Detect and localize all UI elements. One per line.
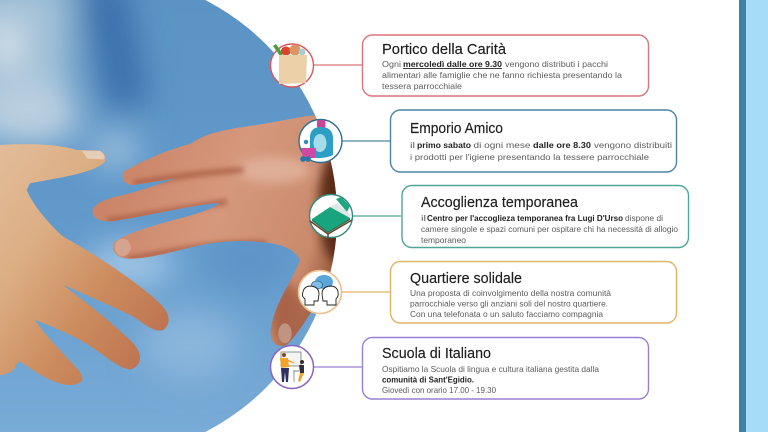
description: camere singole e spazi comuni per ospitare chi ha necessità di allogio (421, 224, 678, 234)
connector (353, 215, 401, 217)
card box (390, 110, 676, 172)
description: Giovedì con orario 17.00 - 19.30 (382, 385, 496, 395)
heading: Quartiere solidale (410, 270, 522, 287)
panel: Portico della Carità (270, 35, 648, 96)
description: il (410, 140, 415, 150)
description: comunità di Sant'Egidio. (382, 374, 474, 384)
description: dispone di (625, 213, 663, 223)
connector (313, 64, 362, 66)
description (382, 59, 622, 91)
description: Ospitiamo la Scuola di lingua e cultura italiana gestita dalla (382, 364, 599, 374)
card box (402, 186, 688, 248)
panel: Quartiere solidale (298, 262, 676, 323)
heading: Scuola di Italiano (382, 345, 491, 362)
description (421, 213, 678, 245)
icon: detergent bottle (299, 120, 342, 162)
description (410, 140, 672, 162)
description: Una proposta di coinvolgimento della nostra comunità (410, 288, 611, 298)
icon: grocery bag (270, 44, 314, 87)
description (382, 364, 599, 395)
connector (342, 291, 390, 293)
card box (390, 262, 676, 323)
icon: two heads talking (298, 270, 342, 314)
description: temporaneo (421, 235, 466, 245)
photo: two reaching hands in a blue sky disc (0, 0, 358, 432)
description: vengono distributi i pacchi (505, 59, 608, 69)
description: Con una telefonata o un saluto facciamo compagnia (410, 309, 603, 319)
description: Centro per l'accoglieza temporanea fra Lugi D'Urso (427, 213, 623, 223)
panel: Emporio Amico (299, 110, 676, 172)
description (410, 288, 611, 319)
heading: Emporio Amico (410, 120, 503, 137)
description: dalle ore 8.30 (533, 140, 591, 150)
description: alimentari alle famiglie che ne fanno richiesta presentando la (382, 70, 622, 80)
panel: Scuola di Italiano (270, 338, 648, 399)
description: il (421, 213, 426, 223)
description: tessera parrocchiale (382, 81, 462, 91)
card box (362, 338, 648, 399)
icon: teacher and student (270, 346, 314, 388)
description: i prodotti per l'igiene presentando la tessere parrocchiale (410, 152, 649, 162)
description: primo sabato (417, 140, 471, 150)
right hand (92, 116, 336, 346)
description: parrocchiale verso gli anziani soli del nostro quartiere. (410, 298, 608, 308)
description: Ogni (382, 59, 401, 69)
description: mercoledì dalle ore 9.30 (403, 59, 502, 69)
heading: Accoglienza temporanea (421, 194, 579, 211)
description: di ogni mese (474, 140, 531, 150)
card box (362, 35, 648, 96)
right side band (739, 0, 768, 432)
icon: bed (310, 194, 352, 238)
connector (342, 140, 390, 142)
left hand (0, 144, 169, 385)
panel: Accoglienza temporanea (310, 186, 688, 248)
heading: Portico della Carità (382, 41, 507, 58)
connector (313, 366, 362, 368)
description: vengono distribuiti (594, 140, 672, 150)
